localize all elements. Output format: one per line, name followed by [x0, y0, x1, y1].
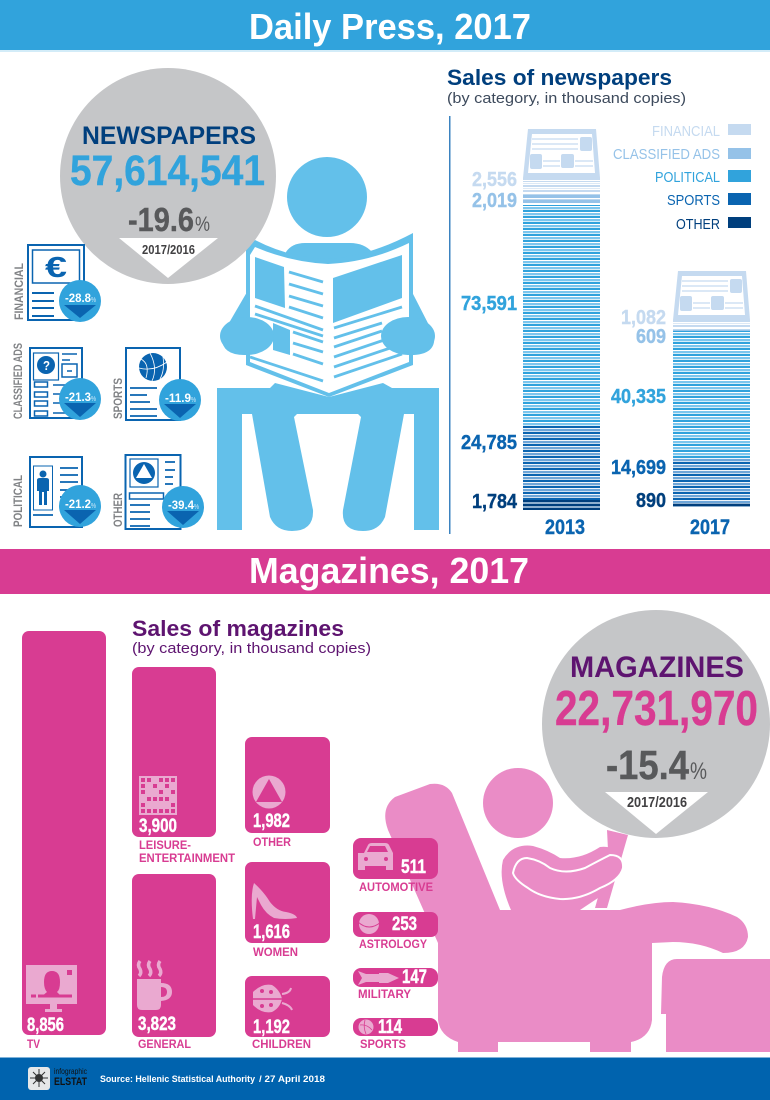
- bar: general: [132, 874, 216, 1051]
- legend: newspaper categories: CLASSIFIED ADS: [613, 146, 720, 163]
- bar: women: 1,616: [253, 922, 290, 943]
- values: 2013 newspapers: 2,556: [472, 169, 517, 191]
- pill: military: MILITARY: [358, 987, 411, 1001]
- footer: Source: Hellenic Statistical Authority: [100, 1074, 255, 1084]
- bar: leisure-entertainment: [132, 667, 236, 865]
- header: daily press: [0, 0, 770, 52]
- legend: newspaper categories: OTHER: [676, 216, 720, 233]
- bar: tv: TV: [27, 1037, 40, 1051]
- heading: sales of newspapers: Sales of newspapers: [447, 65, 672, 90]
- bar: children: 1,192: [253, 1017, 290, 1038]
- stat circle: newspapers: [60, 68, 276, 284]
- pill: military: [353, 967, 438, 1001]
- pill: astrology: 253: [392, 914, 417, 935]
- stat circle: newspapers: 2017/2016: [142, 242, 195, 257]
- illustration: person reading newspaper: [217, 157, 439, 531]
- bar: other magazines: [245, 737, 330, 849]
- values: 2013 newspapers: 1,784: [472, 491, 518, 513]
- pill: automotive: AUTOMOTIVE: [359, 880, 433, 894]
- values: 2013 newspapers: 2013: [545, 516, 585, 539]
- bar: children: [245, 976, 330, 1051]
- values: 2017 newspapers: 14,699: [611, 457, 666, 479]
- values: 2013 newspapers: 2,019: [472, 190, 517, 212]
- stat circle: magazines: %: [690, 758, 707, 785]
- tile: sports: -11.9: [165, 393, 191, 405]
- tile: financial: %: [91, 297, 96, 304]
- tile: classified ads: -21.3: [65, 392, 91, 404]
- stat circle: newspapers: %: [195, 213, 210, 236]
- values: 2013 newspapers: 73,591: [461, 293, 517, 315]
- values: 2013 newspapers: [461, 169, 585, 539]
- bar: general: 3,823: [138, 1014, 176, 1035]
- tile: political: -21.2: [65, 499, 91, 511]
- legend: newspaper categories: FINANCIAL: [652, 123, 720, 140]
- tile: classified ads: ?: [43, 358, 50, 373]
- tile: other: [111, 455, 204, 529]
- tile: political: [11, 457, 101, 527]
- legend: newspaper categories: [613, 123, 751, 233]
- values: 2017 newspapers: 2017: [690, 516, 730, 539]
- bar: 2017 newspapers: [673, 271, 750, 507]
- bar: women: WOMEN: [253, 945, 298, 959]
- legend: newspaper categories: SPORTS: [667, 192, 720, 209]
- bar: other magazines: 1,982: [253, 811, 290, 832]
- logo: elstat: infographic: [54, 1067, 87, 1076]
- stat circle: magazines: 2017/2016: [627, 794, 687, 811]
- legend: newspaper categories: POLITICAL: [655, 169, 720, 186]
- tile: classified ads: CLASSIFIED ADS: [11, 343, 25, 419]
- heading: sales of magazines: [132, 616, 371, 657]
- values: 2017 newspapers: 40,335: [611, 386, 666, 408]
- header: daily press: Daily Press, 2017: [249, 6, 531, 47]
- heading: sales of magazines: (by category, in thousand copies): [132, 640, 371, 657]
- bar: tv: [22, 631, 106, 1051]
- logo: elstat: ELSTAT: [54, 1076, 87, 1088]
- heading: sales of magazines: Sales of magazines: [132, 616, 344, 641]
- tile: financial: FINANCIAL: [12, 263, 26, 320]
- pill: automotive: [353, 838, 438, 894]
- values: 2013 newspapers: 24,785: [461, 432, 517, 454]
- tile: political: POLITICAL: [11, 475, 25, 527]
- values: 2017 newspapers: 1,082: [621, 307, 666, 329]
- pill: astrology: [353, 912, 438, 951]
- tile: classified ads: %: [91, 396, 96, 403]
- pill: sports magazines: [353, 1017, 438, 1051]
- header: magazines: [0, 549, 770, 594]
- bar: children: CHILDREN: [252, 1037, 311, 1051]
- stat circle: magazines: -15.4: [606, 742, 689, 788]
- illustration: person reading in armchair: [385, 768, 770, 1052]
- heading: sales of newspapers: [447, 65, 686, 107]
- tile: other: OTHER: [111, 493, 125, 527]
- tile: classified ads: [11, 343, 101, 420]
- pill: sports magazines: SPORTS: [360, 1037, 406, 1051]
- values: 2017 newspapers: 890: [636, 490, 666, 512]
- tile: other: %: [194, 504, 199, 511]
- pill: military: 147: [402, 967, 427, 988]
- bar: general: GENERAL: [138, 1037, 191, 1051]
- bar: other magazines: OTHER: [253, 835, 291, 849]
- values: 2017 newspapers: [611, 307, 730, 539]
- tile: other: -39.4: [168, 500, 195, 512]
- pill: astrology: ASTROLOGY: [359, 937, 427, 951]
- tile: financial: -28.8: [65, 293, 92, 305]
- pill: sports magazines: 114: [378, 1017, 402, 1038]
- tile: sports: [111, 348, 201, 421]
- bar: women: [245, 862, 330, 959]
- header: magazines: Magazines, 2017: [249, 550, 529, 591]
- bar: tv: 8,856: [27, 1015, 64, 1036]
- heading: sales of newspapers: (by category, in thousand copies): [447, 90, 686, 107]
- stat circle: newspapers: 57,614,541: [70, 147, 265, 195]
- tile: sports: %: [191, 397, 196, 404]
- footer: / 27 April 2018: [259, 1074, 325, 1084]
- tile: financial: €: [45, 252, 67, 284]
- stat circle: magazines: [542, 610, 770, 838]
- bar: leisure-entertainment: 3,900: [139, 816, 177, 837]
- pill: automotive: 511: [401, 857, 426, 878]
- logo: elstat: [28, 1067, 87, 1090]
- tile: sports: SPORTS: [111, 378, 125, 419]
- footer: [0, 1057, 770, 1100]
- stat circle: magazines: MAGAZINES: [570, 651, 744, 684]
- stat circle: newspapers: NEWSPAPERS: [82, 122, 256, 150]
- tile: political: %: [91, 503, 96, 510]
- bar: leisure-entertainment: LEISURE-: [139, 838, 191, 852]
- bar: 2013 newspapers: [523, 129, 600, 510]
- tile: financial: [12, 245, 101, 322]
- stat circle: newspapers: -19.6: [128, 201, 194, 238]
- values: 2017 newspapers: 609: [636, 326, 666, 348]
- bar: leisure-entertainment: ENTERTAINMENT: [139, 851, 236, 865]
